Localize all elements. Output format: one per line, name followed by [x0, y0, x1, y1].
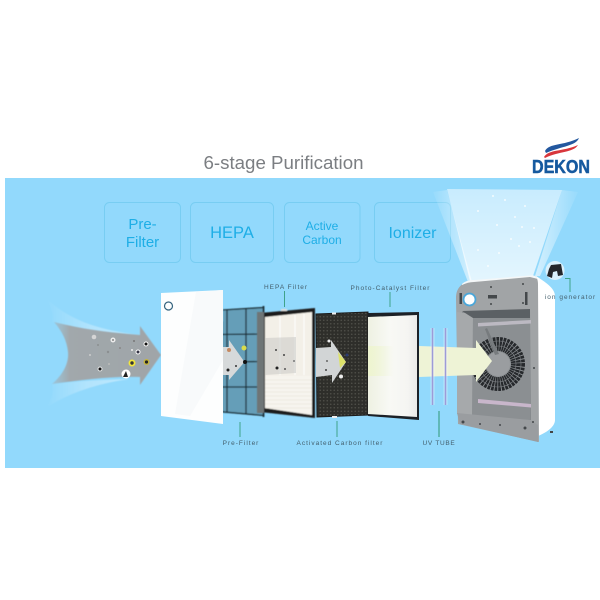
logo swoosh [544, 138, 579, 158]
label: HEPA Filter: HEPA Filter [264, 284, 308, 291]
stage box: HEPA: HEPA [210, 224, 254, 242]
left inner wall [457, 312, 473, 416]
label: UV TUBE: UV TUBE [423, 440, 455, 447]
inner cavity shadow [462, 310, 531, 420]
label: Activated Carbon filter [297, 421, 383, 447]
title: 6-stage Purification [204, 152, 363, 173]
grey arrow [52, 322, 161, 385]
grid pre-filter [219, 306, 264, 417]
stage box: Active Carbon: Carbon [302, 233, 342, 247]
activated carbon filter [316, 312, 368, 418]
grey front frame [456, 276, 539, 442]
photo-catalyst filter [368, 312, 419, 420]
label: Photo-Catalyst Filter [351, 285, 430, 307]
stage box: Active Carbon [284, 202, 360, 262]
pollutant particles [89, 335, 150, 378]
outlet button [464, 294, 476, 306]
clean air beam [433, 189, 578, 282]
label: Activated Carbon filter: Activated Carbon filter [297, 440, 383, 447]
incoming polluted air arrow [46, 298, 161, 408]
upper wind swoosh [46, 298, 140, 335]
stage box: Pre-Filter: Pre- [128, 216, 157, 233]
back wall [472, 318, 530, 420]
arrow through carbon filter [316, 340, 348, 383]
lower wind swoosh [46, 379, 130, 408]
fan grille [470, 328, 526, 392]
UV tubes [432, 328, 446, 405]
logo wordmark: DEKON [532, 157, 590, 177]
stage box: Pre-Filter [104, 202, 180, 262]
label: Pre-Filter: Pre-Filter [223, 440, 259, 447]
stage box: Pre-Filter: Filter [126, 234, 159, 251]
upper UV lamp rail [478, 320, 531, 326]
lower UV lamp rail [478, 399, 531, 408]
arrow through HEPA filter [265, 337, 296, 375]
rear foot [550, 431, 553, 433]
top frame shadow [462, 309, 530, 318]
stage box: Ionizer [374, 202, 450, 262]
label: UV TUBE [423, 411, 455, 447]
stage box: HEPA [190, 202, 274, 262]
label: Pre-Filter [223, 422, 259, 447]
stage box: Ionizer: Ionizer [388, 225, 437, 242]
arrow through pre-filter [219, 340, 247, 380]
blue background panel [5, 178, 600, 468]
HEPA filter [257, 308, 315, 418]
air purifier unit [456, 275, 555, 442]
stage box: Active Carbon: Active [306, 219, 339, 233]
label: HEPA Filter [264, 284, 308, 307]
top frame vents [460, 283, 535, 430]
cover ring indicator [164, 302, 172, 310]
white top rim [462, 275, 538, 285]
label: ion generator [545, 278, 596, 301]
white housing side [536, 276, 555, 436]
label: ion generator: ion generator [545, 294, 596, 301]
white pre-filter cover panel [161, 290, 223, 424]
ion generator icon [546, 261, 564, 280]
label: Photo-Catalyst Filter: Photo-Catalyst Filter [351, 285, 430, 292]
bottom tray [457, 413, 538, 442]
logo: DEKON [532, 138, 590, 177]
arrow into purifier [419, 340, 492, 382]
